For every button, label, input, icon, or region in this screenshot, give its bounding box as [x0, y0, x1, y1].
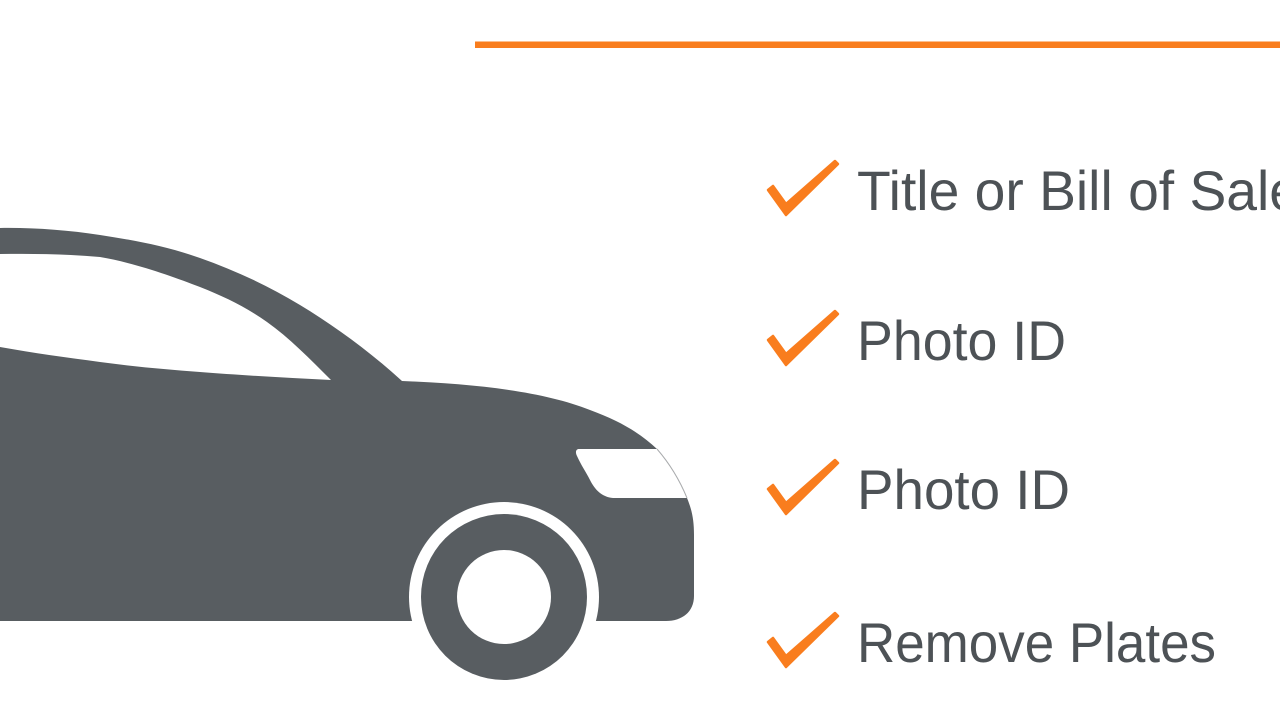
checklist item: Remove Plates: Remove Plates [857, 611, 1216, 674]
car tyre [421, 514, 587, 680]
checklist item: Photo ID: Photo ID [857, 309, 1066, 372]
icon: orange check [768, 460, 838, 514]
checklist item: Photo ID second: Photo ID [857, 458, 1070, 521]
icon: orange check [768, 311, 838, 365]
car window [0, 254, 331, 380]
headlight edge line [657, 449, 687, 498]
checklist item: Photo ID second [768, 458, 1070, 521]
wheel arch [409, 502, 599, 692]
icon: orange check [768, 161, 838, 215]
car hub [457, 550, 551, 644]
checklist item: Photo ID [768, 309, 1066, 372]
icon: car silhouette [0, 228, 694, 692]
car headlight [576, 449, 687, 498]
orange header rule [475, 42, 1280, 48]
icon: orange check [768, 613, 838, 667]
